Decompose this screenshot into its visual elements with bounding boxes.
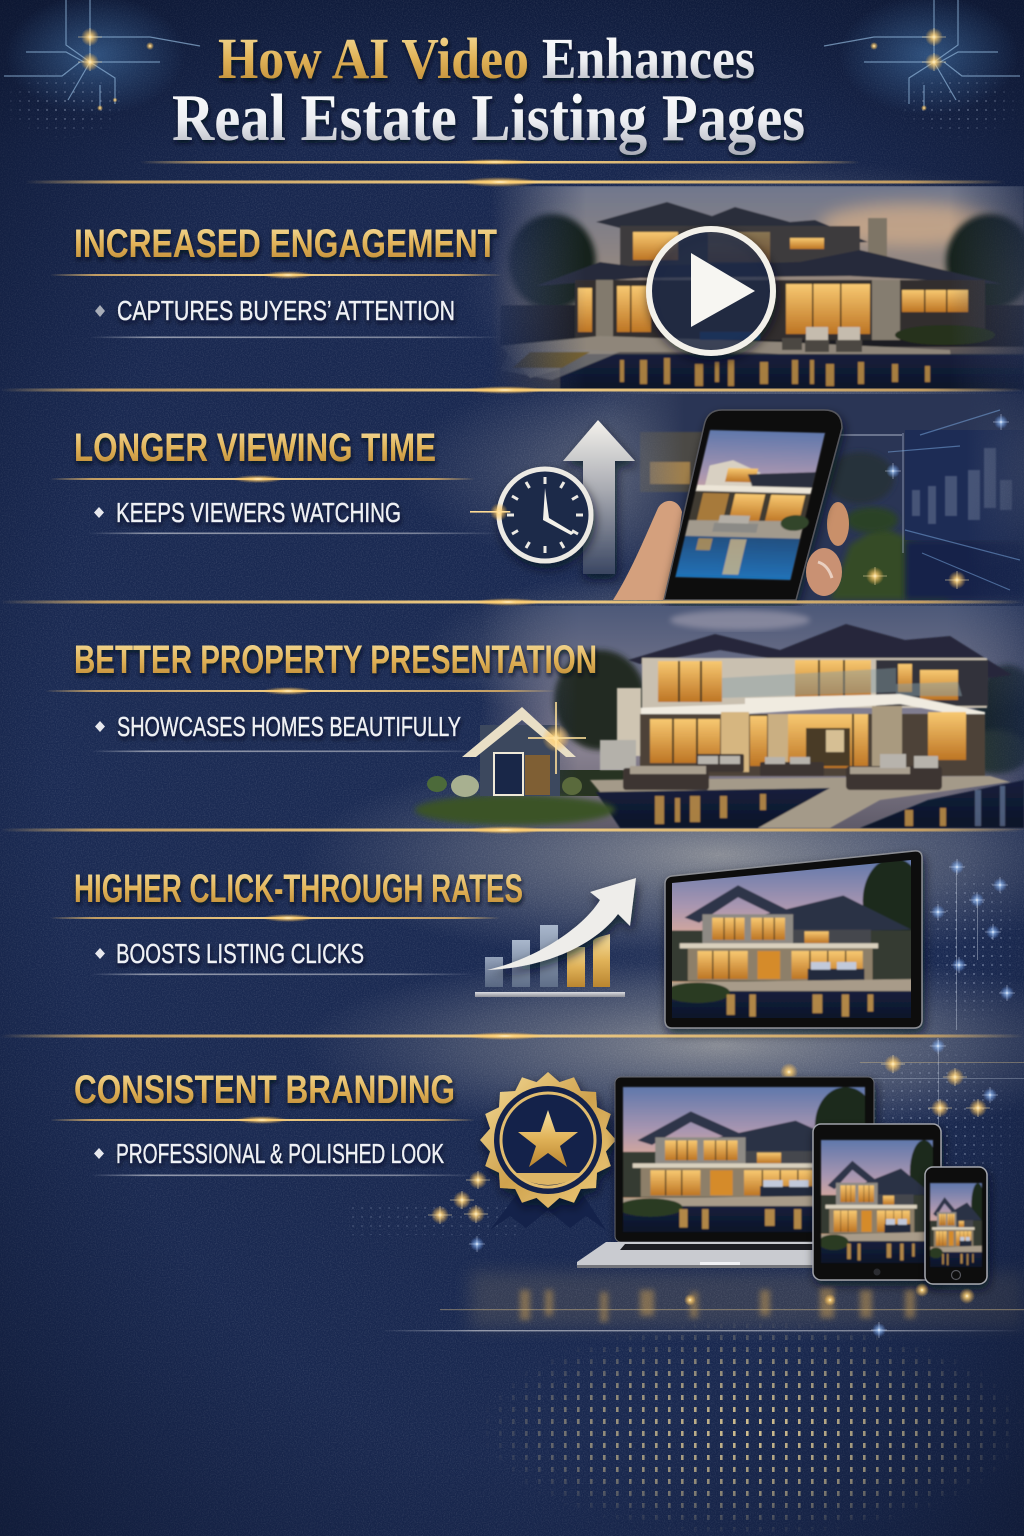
bullet: professional and polished look (94, 1138, 444, 1169)
icon: hand holding phone (613, 410, 849, 600)
bullet: showcases homes beautifully (95, 711, 461, 742)
icon: gold badge (480, 1072, 616, 1230)
title: Real Estate Listing Pages (172, 81, 805, 155)
illustration: luxury house (590, 624, 1024, 828)
heading: better property presentation: BETTER PROPERTY PRESENTATION (74, 638, 597, 682)
icon: tablet with house (665, 851, 924, 1028)
divider (0, 826, 1024, 834)
panel: increased engagement house photo (490, 186, 1024, 390)
rule (50, 271, 502, 279)
divider (25, 177, 1005, 187)
rule (90, 974, 475, 975)
icon: small house with star (415, 702, 615, 825)
icon: phone (925, 1167, 987, 1284)
icon: arrow up (563, 420, 635, 574)
heading: increased engagement: INCREASED ENGAGEMENT (74, 222, 497, 266)
dotted lights: right of tablet (928, 859, 1020, 1030)
bullet: showcases homes beautifully: SHOWCASES HOMES BEAUTIFULLY (117, 711, 461, 742)
heading: consistent branding: CONSISTENT BRANDING (74, 1068, 455, 1112)
icon: tablet (813, 1124, 941, 1280)
rule (50, 475, 475, 483)
rule (90, 750, 480, 752)
bullet: boosts listing clicks: BOOSTS LISTING CLICKS (116, 938, 364, 969)
lights: bottom reflections and dot field (380, 1283, 1024, 1536)
rule (50, 1116, 475, 1124)
divider (0, 1032, 1024, 1040)
bullet: professional and polished look: PROFESSIONAL & POLISHED LOOK (116, 1138, 444, 1169)
rule (45, 687, 555, 695)
rule (88, 532, 500, 534)
lights: upper right of devices (780, 1038, 1024, 1182)
heading: longer viewing time: LONGER VIEWING TIME (74, 426, 436, 470)
icon: clock (470, 469, 591, 561)
bullet: boosts listing clicks (95, 938, 364, 969)
rule (50, 914, 500, 922)
title: How AI Video Enhances (218, 26, 755, 91)
gold sparkles: left of devices (350, 1171, 520, 1252)
divider (0, 598, 1024, 606)
title (172, 26, 805, 155)
rule (90, 336, 502, 338)
bullet: keeps viewers watching: KEEPS VIEWERS WATCHING (116, 497, 401, 528)
panel: longer viewing time backdrop (610, 394, 1024, 600)
panel: better property presentation house photo (480, 606, 1024, 830)
digital lines and light (840, 410, 1020, 590)
circuit decoration: top left (0, 0, 200, 140)
icon: bar chart with arrow (475, 878, 636, 997)
circuit decoration: top right (824, 0, 1024, 140)
heading: higher click-through rates: HIGHER CLICK-THROUGH RATES (74, 867, 523, 911)
icon: laptop (577, 1077, 876, 1268)
icon: play button (649, 229, 773, 353)
rule (90, 1174, 475, 1176)
title rule (140, 159, 860, 165)
bullet: captures buyers' attention: CAPTURES BUYERS’ ATTENTION (117, 295, 455, 326)
bullet: keeps viewers watching (94, 497, 401, 528)
divider (0, 386, 1024, 394)
